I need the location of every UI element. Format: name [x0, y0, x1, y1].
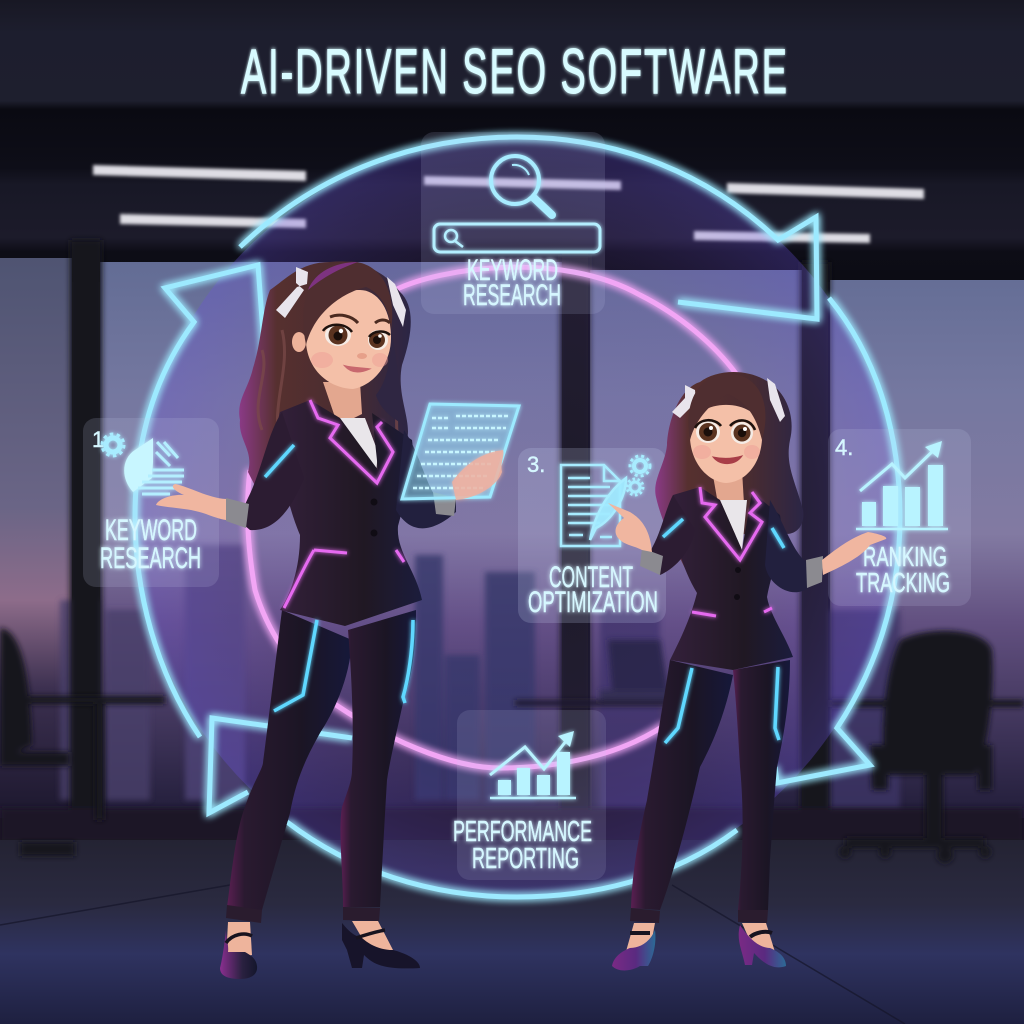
- left hand: [156, 484, 226, 520]
- floor: [0, 840, 1024, 1024]
- jacket: [278, 400, 422, 626]
- left sleeve: [645, 495, 695, 575]
- trouser cuffs: [226, 905, 380, 923]
- panel: step 2 keyword research: [421, 132, 605, 314]
- icon: gears: [627, 456, 650, 495]
- pointing hand: [608, 503, 652, 552]
- label: [856, 541, 950, 598]
- panel: step 4 ranking tracking: [828, 429, 971, 606]
- ribbons: [276, 267, 406, 327]
- white shirt: [340, 418, 378, 474]
- label: KEYWORD: [467, 254, 558, 287]
- left leg: [631, 660, 733, 910]
- shoe: left: [612, 923, 655, 970]
- shoe: right: [342, 921, 420, 968]
- window panes: [0, 258, 1024, 818]
- label: REPORTING: [472, 843, 579, 875]
- hair front: [303, 262, 392, 345]
- ceiling: [0, 0, 1024, 282]
- icon: document and quill: [561, 465, 626, 546]
- icon: rising bar chart: [856, 441, 948, 529]
- label: KEYWORD: [105, 514, 197, 547]
- left sleeve: [238, 412, 304, 530]
- inner pink ring: [248, 267, 737, 768]
- face: [690, 405, 762, 483]
- outer neon cycle arrows: [135, 137, 900, 897]
- jacket: [670, 487, 793, 670]
- hair waves: [258, 330, 400, 445]
- open hand: [822, 532, 886, 575]
- white shirt: [720, 500, 747, 550]
- eyes and mouth: [695, 420, 755, 464]
- arrow: bottom arc: [287, 822, 737, 897]
- right leg: [340, 610, 416, 907]
- arrow: right arc: [775, 298, 900, 783]
- holographic tablet: [402, 404, 519, 500]
- shoe: right: [739, 923, 786, 967]
- label: [453, 816, 592, 875]
- eyes, nose and mouth: [323, 315, 390, 372]
- neck: [323, 382, 362, 426]
- arrow: top arc: [240, 137, 817, 319]
- label: CONTENT: [549, 561, 633, 594]
- label: RANKING: [863, 541, 947, 572]
- label: PERFORMANCE: [453, 816, 592, 848]
- columns and mullions: [0, 240, 1024, 842]
- icon: performance chart: [490, 731, 576, 798]
- label: OPTIMIZATION: [528, 586, 658, 619]
- label: [463, 254, 561, 312]
- hair back: [239, 261, 411, 505]
- hair lock right of face: [376, 330, 405, 425]
- right sleeve: [765, 500, 808, 592]
- neon trim on suit: [284, 400, 404, 608]
- title: AI-DRIVEN SEO SOFTWARE: [241, 37, 787, 108]
- right sleeve: [396, 430, 456, 528]
- neon trim on suit: [692, 487, 772, 616]
- hair back: [655, 372, 803, 578]
- ceiling lights: [93, 165, 924, 243]
- step number 4: 4.: [835, 435, 853, 460]
- office furniture: [0, 628, 1024, 863]
- icon: magnifying glass: [491, 156, 552, 215]
- ribbons: [672, 378, 785, 422]
- left leg: [227, 610, 352, 910]
- panel: step 5 performance reporting: [453, 710, 606, 880]
- step number 1: 1: [92, 427, 104, 452]
- label: [528, 561, 658, 619]
- step number 3: 3.: [527, 452, 545, 477]
- panel: step 1 keyword research: [83, 418, 219, 587]
- character: left presenter: [156, 261, 456, 979]
- label: RESEARCH: [100, 542, 201, 575]
- shoe: left: [220, 922, 257, 979]
- cycle interior tint: [136, 136, 898, 898]
- label: [100, 514, 201, 575]
- trouser cuffs: [630, 908, 768, 923]
- label: RESEARCH: [463, 279, 561, 312]
- right leg: [733, 660, 790, 910]
- character: right presenter: [608, 372, 886, 971]
- search bar: [434, 224, 600, 252]
- panel: step 3 content optimization: [518, 448, 666, 623]
- face: [306, 290, 391, 389]
- hair front: [688, 374, 765, 440]
- neck: [712, 470, 744, 504]
- arrow: lower left head: [209, 718, 352, 813]
- jacket buttons: [735, 567, 741, 573]
- arrow: left arc: [135, 265, 265, 737]
- blurred city skyline: [60, 545, 900, 810]
- ear: [292, 332, 306, 352]
- icon: pie chart: [124, 438, 184, 494]
- label: TRACKING: [856, 567, 950, 598]
- hand on tablet: [452, 450, 503, 500]
- icon: gear: [102, 434, 124, 456]
- jacket buttons: [370, 498, 378, 506]
